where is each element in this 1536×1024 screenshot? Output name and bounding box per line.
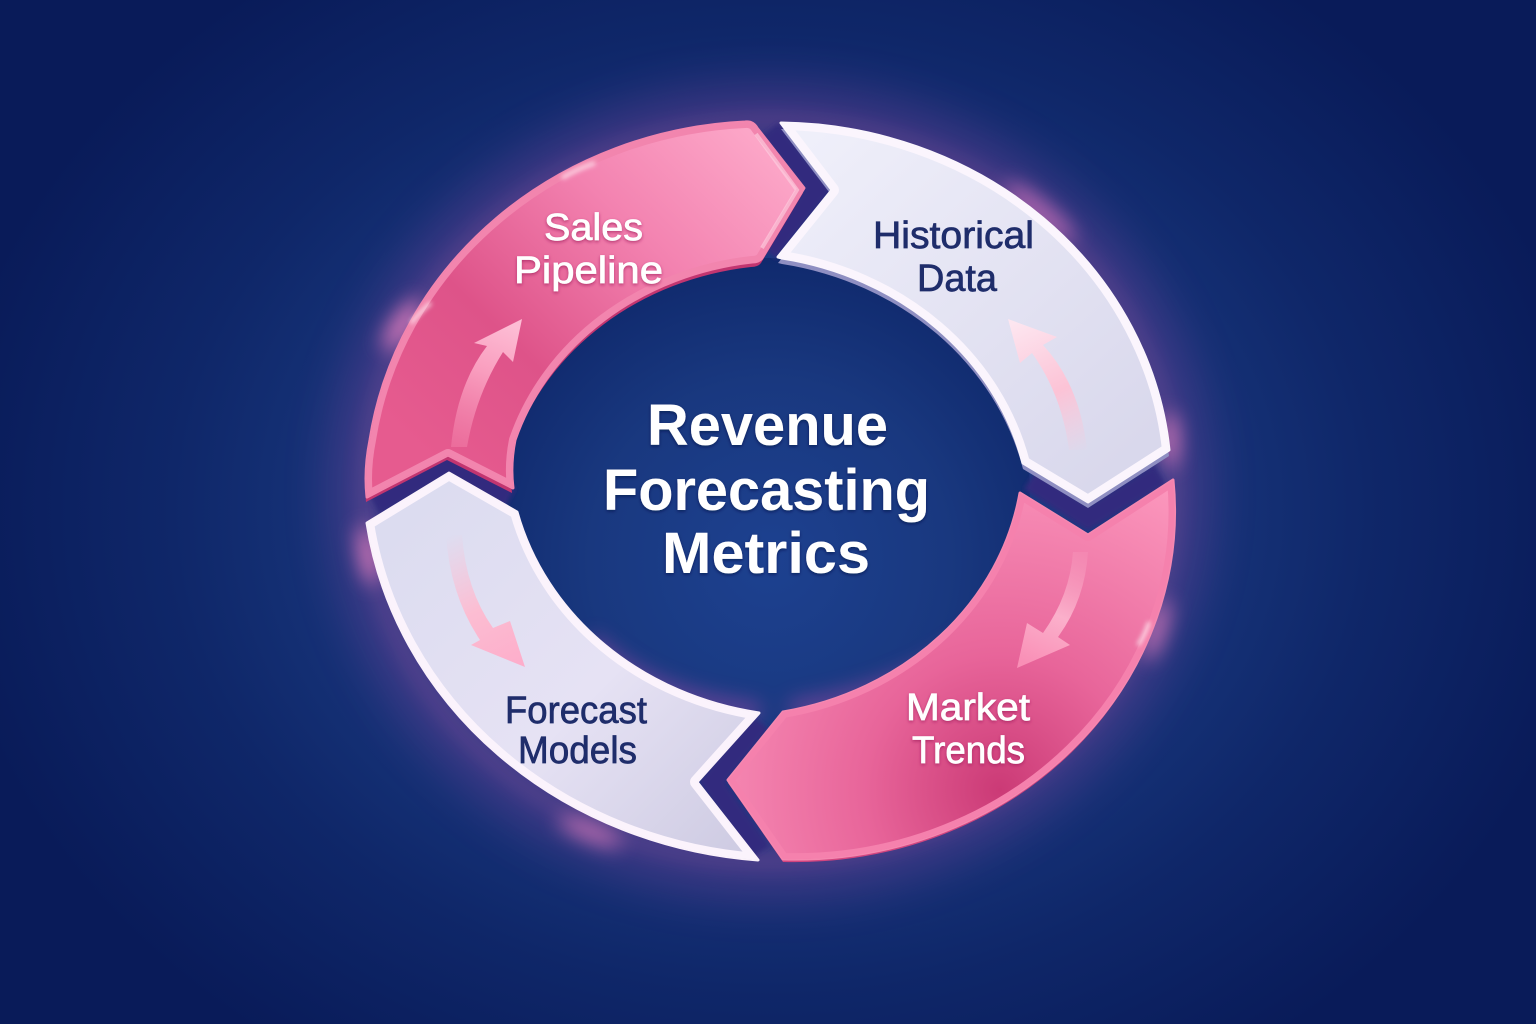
- panel: market trends segment: [728, 480, 1175, 862]
- label: historical data: Historical: [873, 215, 1034, 257]
- ring glow: [355, 115, 1180, 867]
- label: forecast models: Models: [518, 730, 637, 772]
- arrow: historical data: [1008, 319, 1087, 450]
- title: Forecasting: [603, 458, 930, 523]
- label: sales pipeline: Pipeline: [514, 250, 663, 292]
- label: market trends: Trends: [912, 730, 1025, 772]
- arrow: forecast models: [446, 535, 525, 667]
- label: market trends: Market: [906, 687, 1030, 729]
- panel: historical data segment: [778, 123, 1169, 508]
- panel: sales pipeline segment: [365, 122, 804, 502]
- panel: forecast models segment: [367, 473, 759, 860]
- arrow: sales pipeline: [451, 319, 522, 447]
- title: Metrics: [662, 521, 870, 586]
- label: forecast models: Forecast: [505, 690, 647, 732]
- label: historical data: Data: [917, 258, 998, 300]
- title: Revenue: [647, 393, 888, 458]
- label: sales pipeline: Sales: [544, 207, 643, 249]
- arrow: market trends: [1017, 552, 1088, 668]
